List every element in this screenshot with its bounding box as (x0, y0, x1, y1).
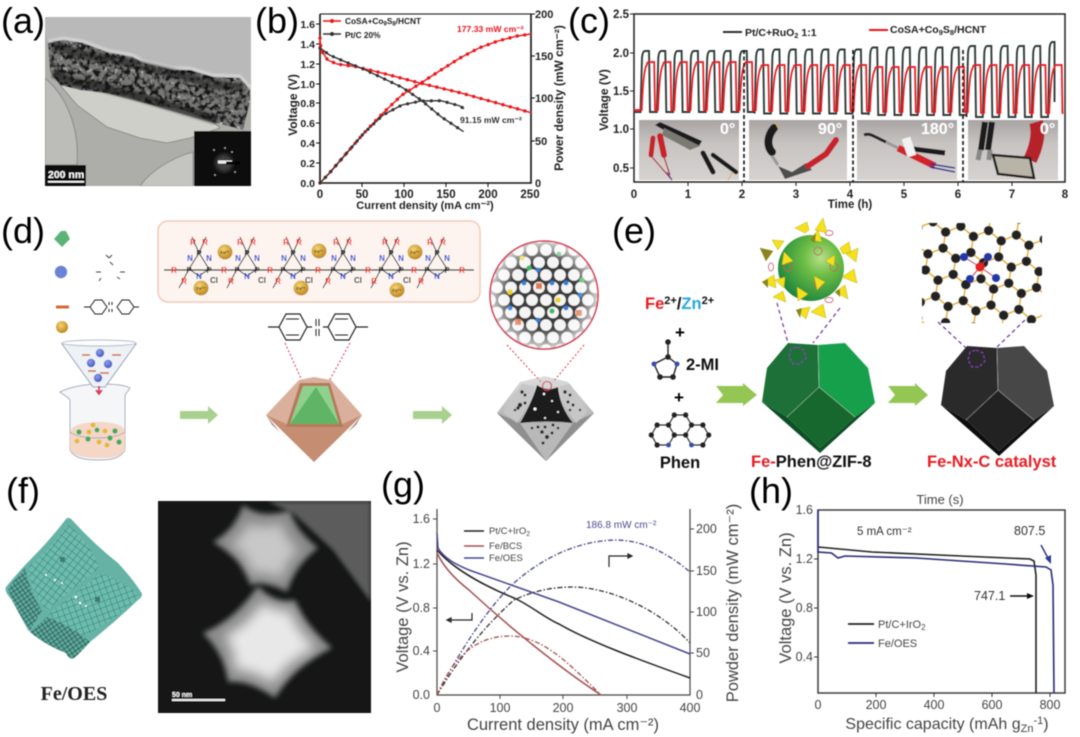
polymer chain box: P (206, 266, 212, 275)
chart b: voltage and power density: 0.8 (300, 98, 315, 110)
chart c: cycling under bending: 2 (739, 189, 745, 201)
chart c: cycling under bending (597, 9, 1069, 211)
chart c: cycling under bending: 1 (685, 189, 692, 201)
polymer chain box: R (333, 238, 339, 247)
chart c: cycling under bending: 8 (950, 28, 954, 37)
polymer chain box: Fe²⁺ (220, 250, 230, 255)
chart g: discharge polarization: Powder density (mW cm⁻²) (724, 504, 742, 702)
photo: 0 degrees (639, 120, 739, 180)
facet: right lens (48, 573, 140, 636)
chart h: specific capacity: 0.4 (796, 650, 813, 664)
chart c: cycling under bending: /HCNT (954, 24, 987, 36)
chart g: discharge polarization: 100 (696, 605, 717, 619)
chart g: discharge polarization: 50 (696, 646, 710, 660)
label (d): (d) (1, 210, 45, 251)
reagent: 2-methylimidazole (652, 339, 719, 380)
polymer chain box: N (244, 272, 250, 281)
funnel and beaker (60, 340, 136, 460)
polymer chain box: P (254, 266, 260, 275)
polymer chain box: N (425, 254, 431, 263)
halo (48, 38, 251, 88)
hollow polyhedron (497, 345, 594, 461)
chart b: voltage and power density: Pt/C 20% (345, 30, 381, 40)
chart b: voltage and power density: 1.0 (300, 79, 315, 91)
chart b: voltage and power density: 0 (535, 178, 541, 190)
chart h: specific capacity: 747.1 (974, 589, 1005, 603)
chart b: voltage and power density: /HCNT (396, 16, 421, 26)
diffraction inset (194, 131, 251, 186)
chart h: specific capacity: 0 (815, 698, 822, 712)
polymer chain box: R (171, 266, 177, 275)
polymer chain box: N (350, 254, 356, 263)
polymer chain box: R (325, 277, 331, 286)
chart h: specific capacity: 400 (924, 698, 944, 712)
chart b: voltage and power density: 0.2 (300, 158, 315, 170)
polymer chain box: P (244, 249, 250, 258)
polymer chain box: P (234, 266, 240, 275)
polymer chain box: R (283, 238, 289, 247)
chart h: specific capacity: Fe/OES (878, 638, 917, 650)
chart g: discharge polarization: 1.2 (413, 557, 430, 571)
Phen label: Phen (660, 454, 700, 472)
polymer chain box: N (398, 254, 404, 263)
magnified N-doped carbon lattice (490, 241, 598, 349)
polymer chain box: N (235, 254, 241, 263)
chart b: voltage and power density: 50 (535, 136, 547, 148)
reagent: metal ions: Zn (681, 295, 702, 313)
chart c: cycling under bending: 4 (847, 189, 854, 201)
polymer chain box: R (237, 238, 243, 247)
chart b: voltage and power density: S (387, 16, 393, 26)
chart c: cycling under bending: 8 (1062, 189, 1069, 201)
Fe-Nx-C catalyst label: Fe-Nx-C catalyst (927, 453, 1057, 471)
polymer chain box: P (434, 249, 440, 258)
arrow 3 (716, 383, 757, 406)
reagent: 2-methylimidazole: 2-MI (686, 356, 719, 374)
polymer chain box: N (331, 254, 337, 263)
scale bar: 50 nm (172, 692, 192, 699)
chart b: voltage and power density: 1.2 (300, 59, 315, 71)
polymer chain box: R (394, 238, 400, 247)
polymer chain box: Fe²⁺ (410, 250, 420, 255)
reagent: metal ions: Fe (645, 295, 664, 313)
chart c: cycling under bending: Voltage (V) (597, 69, 611, 131)
polymer chain box: Cl (403, 276, 411, 285)
chart b: voltage and power density (286, 9, 566, 212)
chart g: discharge polarization: Fe/OES (489, 553, 523, 564)
chart h: specific capacity: Voltage (V vs. Zn) (777, 532, 795, 664)
polymer chain box: N (196, 272, 202, 281)
chart b: voltage and power density: Current density (mA cm⁻²) (356, 200, 494, 212)
chart h: specific capacity: 2 (921, 623, 926, 632)
polymer chain box: N (340, 272, 346, 281)
label (f): (f) (6, 470, 40, 511)
chart h: specific capacity: 1.6 (796, 503, 813, 517)
azo linker molecule (268, 314, 368, 340)
chart c: cycling under bending: Pt/C+RuO (745, 27, 794, 39)
chart b: voltage and power density: 150 (535, 51, 553, 63)
chart g: discharge polarization: Voltage (V vs. Zn) (394, 541, 412, 673)
polymer chain box: P (350, 266, 356, 275)
chart g: discharge polarization: 0.8 (413, 601, 430, 615)
particle band (48, 40, 250, 130)
polymer chain box: P (388, 249, 394, 258)
chart c: cycling under bending: 6 (955, 189, 961, 201)
polymer chain box: R (440, 238, 446, 247)
panel a: TEM micrograph (45, 17, 251, 186)
chart c: cycling under bending: 9 (939, 28, 943, 37)
panel f: electron micrograph (158, 501, 371, 713)
chart b: voltage and power density: 1.4 (300, 39, 315, 51)
polymer chain box: P (424, 266, 430, 275)
chart h: specific capacity: 0.8 (796, 601, 813, 615)
polymer chain box: R (365, 266, 371, 275)
polymer chain box: R (346, 238, 352, 247)
reagent: metal ions: / (677, 295, 682, 313)
photo: 0 degrees: 0° (720, 121, 735, 138)
photo: 90 degrees (749, 120, 847, 180)
chart h: specific capacity: 800 (1040, 698, 1060, 712)
panel a: TEM micrograph: 200 nm (48, 169, 84, 181)
polymer chain box: P (280, 266, 286, 275)
polymer chain box: Fe²⁺ (296, 286, 306, 291)
polymer chain box: N (379, 254, 385, 263)
chart h: specific capacity: Specific capacity (mAh g (845, 716, 1021, 733)
Fe/OES label: Fe/OES (41, 683, 107, 705)
polymer chain box: R (382, 238, 388, 247)
polymer chain box: R (411, 266, 417, 275)
label (c): (c) (568, 0, 610, 41)
arrow 1 (180, 406, 218, 424)
chart c: cycling under bending: 7 (1009, 189, 1015, 201)
polymer chain box: P (330, 266, 336, 275)
chart c: cycling under bending: 1.5 (613, 86, 630, 98)
polymer chain box: N (300, 254, 306, 263)
polymer chain box: R (221, 266, 227, 275)
polymer chain box: P (444, 266, 450, 275)
polymer chain box: R (228, 277, 234, 286)
support film (45, 78, 77, 165)
reagent: phenanthroline (649, 412, 711, 448)
polymer chain box: Fe²⁺ (392, 288, 402, 293)
polymer chain box: R (296, 238, 302, 247)
chart b: voltage and power density: 0 (317, 189, 323, 201)
facet: left dark (8, 568, 42, 630)
polymer chain box: R (418, 277, 424, 286)
plus sign: + (675, 323, 685, 342)
chart h: specific capacity: 200 (866, 698, 886, 712)
Fe-Nx-C atomic lattice (922, 223, 1042, 348)
polymer chain box: P (186, 266, 192, 275)
chart g: discharge polarization: 0 (696, 688, 703, 702)
chart c: cycling under bending: S (943, 24, 950, 36)
chart c: cycling under bending: 2 (794, 31, 798, 40)
polymer chain box: Cl (354, 276, 362, 285)
chart g: discharge polarization: 150 (696, 564, 717, 578)
chart c: cycling under bending: 3 (793, 189, 799, 201)
polymer chain box: R (267, 266, 273, 275)
polymer chain box: P (340, 249, 346, 258)
Fe-Phen@ZIF-8 label: Fe-Phen@ZIF-8 (751, 453, 872, 471)
polymer chain box: P (398, 266, 404, 275)
polymer chain box: R (275, 277, 281, 286)
chart h: specific capacity: 5 mA cm⁻² (857, 526, 912, 538)
polymer chain box: N (388, 272, 394, 281)
polymer chain box: P (300, 266, 306, 275)
chart b: voltage and power density: 50 (356, 189, 368, 201)
chart c: cycling under bending: 0.5 (613, 163, 630, 175)
ZIF-8 cage model (760, 218, 858, 343)
chart g: discharge polarization: 2 (526, 531, 530, 538)
chart c: cycling under bending: 2.0 (613, 48, 629, 60)
chart c: cycling under bending: 1.0 (613, 124, 629, 136)
photo: 0 degrees flat (968, 120, 1058, 180)
polymer chain box: N (206, 254, 212, 263)
polymer chain box: P (378, 266, 384, 275)
composite polyhedron (266, 343, 362, 462)
chart g: discharge polarization: 100 (490, 701, 510, 715)
chart h: specific capacity: 1.2 (796, 552, 813, 566)
chart b: voltage and power density: 0.0 (300, 178, 315, 190)
photo: 180 degrees (857, 120, 957, 180)
chart b: voltage and power density: 9 (384, 22, 388, 28)
polymer chain box (158, 221, 480, 302)
polymer chain box: R (202, 238, 208, 247)
polymer chain box: N (444, 254, 450, 263)
polymer chain box: Fe²⁺ (314, 249, 324, 254)
arrow 2 (413, 406, 452, 424)
arrow 4 (888, 383, 928, 406)
chart b: voltage and power density: 200 (535, 9, 553, 21)
chart h: specific capacity: ) (1043, 716, 1049, 733)
label (g): (g) (381, 464, 425, 505)
chart b: voltage and power density: 150 (436, 189, 456, 201)
chart g: discharge polarization: 0.4 (413, 644, 430, 658)
chart g: discharge polarization: 0.0 (413, 688, 430, 702)
photo: 0 degrees flat: 0° (1040, 121, 1055, 138)
chart b: voltage and power density: 8 (392, 22, 396, 28)
chart b: voltage and power density: 0.4 (300, 138, 315, 150)
polymer chain box: N (281, 254, 287, 263)
chart b: voltage and power density: 0.6 (300, 118, 315, 130)
chart c: cycling under bending: 5 (901, 189, 908, 201)
polymer chain box: R (371, 277, 377, 286)
chart b: voltage and power density: CoSA+Co (345, 16, 384, 26)
chart h: specific capacity (777, 492, 1065, 735)
chart h: specific capacity: Time (s) (916, 492, 964, 507)
chart g: discharge polarization: 186.8 mW cm⁻² (586, 520, 657, 531)
photo: 90 degrees: 90° (818, 121, 842, 138)
reagent: metal ions: 2+ (664, 295, 677, 307)
chart g: discharge polarization: Current density (mA cm⁻²) (467, 716, 659, 734)
chart c: cycling under bending: 0 (631, 189, 637, 201)
chart g: discharge polarization: Fe/BCS (489, 541, 522, 552)
chart h: specific capacity: 807.5 (1014, 524, 1045, 538)
chart g: discharge polarization: 300 (617, 701, 637, 715)
chart c: cycling under bending: 2.5 (613, 9, 630, 21)
chart h: specific capacity: Zn (1021, 723, 1033, 735)
polymer chain box: N (434, 272, 440, 281)
polymer chain box: R (190, 238, 196, 247)
facet: bottom dark (30, 617, 90, 658)
polymer chain box: Cl (210, 276, 218, 285)
polymer chain box: Cl (258, 276, 266, 285)
polymer chain box: P (196, 249, 202, 258)
polymer chain box: R (459, 266, 465, 275)
facet: upper lens (28, 524, 99, 610)
chart g: discharge polarization (394, 504, 742, 734)
label (h): (h) (749, 470, 793, 511)
polymer chain box: R (181, 277, 187, 286)
chart b: voltage and power density: Voltage (V) (286, 74, 300, 136)
chart b: voltage and power density: 100 (535, 93, 553, 105)
chart h: specific capacity: -1 (1033, 715, 1043, 727)
chart b: voltage and power density: 200 (478, 189, 498, 201)
polymer chain box: R (250, 238, 256, 247)
chart b: voltage and power density: Power density (mW cm⁻²) (552, 25, 566, 171)
polymer chain box: N (254, 254, 260, 263)
chart b: voltage and power density: 250 (520, 189, 540, 201)
reagent: metal ions: 2+ (702, 295, 714, 307)
polymer chain box: N (290, 272, 296, 281)
plus sign: + (674, 388, 684, 407)
chart g: discharge polarization: 200 (696, 522, 717, 536)
label (e): (e) (612, 210, 656, 251)
polymer chain box: P (290, 249, 296, 258)
polymer chain box: Fe²⁺ (196, 286, 206, 291)
chart h: specific capacity: Pt/C+IrO (878, 619, 921, 631)
chart b: voltage and power density: 100 (394, 189, 414, 201)
polymer chain box: R (427, 238, 433, 247)
chart g: discharge polarization: 200 (553, 701, 573, 715)
polymer chain box: R (315, 266, 321, 275)
chart g: discharge polarization: Pt/C+IrO (489, 526, 526, 537)
black polyhedron (941, 346, 1054, 456)
chart b: voltage and power density: 1.6 (300, 19, 315, 31)
chart h: specific capacity: 600 (982, 698, 1002, 712)
green polyhedron (762, 343, 875, 453)
polymer chain box: N (187, 254, 193, 263)
chart c: cycling under bending: 1:1 (798, 27, 817, 39)
label (a): (a) (1, 0, 45, 41)
Fe/OES structure model (6, 518, 142, 658)
chart g: discharge polarization: 0 (434, 701, 441, 715)
label (b): (b) (255, 0, 299, 41)
chart b: voltage and power density: 177.33 mW cm⁻² (457, 24, 524, 34)
chart g: discharge polarization: 400 (680, 701, 700, 715)
polymer chain box: Cl (305, 276, 313, 285)
chart b: voltage and power density: 91.15 mW cm⁻² (460, 115, 522, 125)
chart g: discharge polarization: 1.6 (413, 512, 430, 526)
photo: 180 degrees: 180° (921, 121, 954, 138)
scale bar (45, 165, 86, 186)
legend icons: precursors (54, 231, 139, 333)
chart c: cycling under bending: CoSA+Co (890, 24, 939, 36)
chart c: cycling under bending: Time (h) (828, 199, 872, 211)
